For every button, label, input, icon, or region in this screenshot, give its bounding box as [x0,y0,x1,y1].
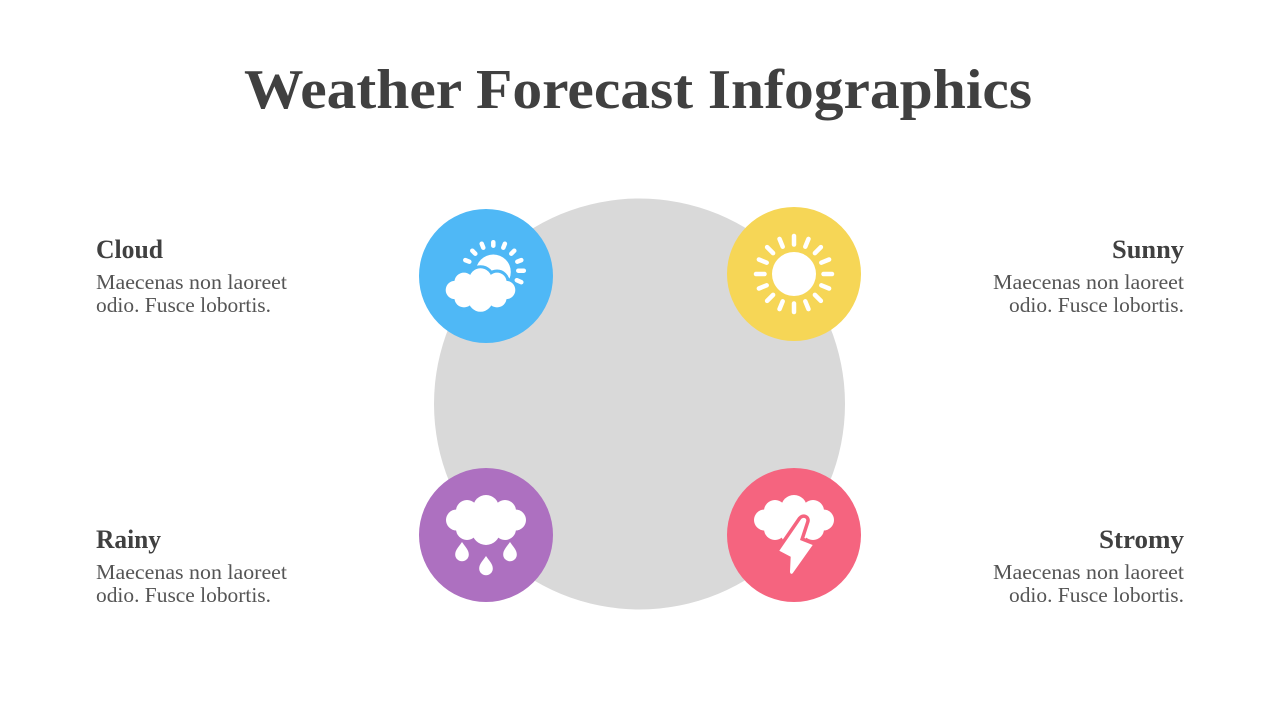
text block: cloud [96,235,287,317]
title: Weather Forecast Infographics [244,59,1032,121]
panel: cloud icon [419,209,553,343]
text block: rainy [96,525,287,607]
text block: rainy: odio. Fusce lobortis. [96,583,271,607]
text block: stromy: Maecenas non laoreet [993,560,1184,584]
text block: sunny: odio. Fusce lobortis. [1009,293,1184,317]
text block: sunny [993,235,1184,317]
text block: stromy: odio. Fusce lobortis. [1009,583,1184,607]
icon: sun disc [476,254,511,290]
text block: stromy [993,525,1184,607]
icon: lightning bolt [779,518,813,574]
central grey circle [434,198,845,610]
text block: rainy: Rainy [96,525,161,554]
text block: rainy: Maecenas non laoreet [96,560,287,584]
icon: cloud [446,495,526,545]
text block: stromy: Stromy [1099,525,1184,554]
text block: sunny: Maecenas non laoreet [993,270,1184,294]
icon: sun disc [772,252,816,296]
icon: cloud [446,268,515,312]
icon: sun rays [756,236,832,312]
icon: sun rays behind cloud [465,242,524,282]
panel: sunny icon [727,207,861,341]
text block: sunny: Sunny [1112,235,1184,264]
text block: cloud: Cloud [96,235,164,264]
text block: cloud: odio. Fusce lobortis. [96,293,271,317]
panel: rainy icon [419,468,553,602]
icon: cloud [754,495,834,545]
icon: rain drops [455,542,517,575]
panel: stormy icon [727,468,861,602]
text block: cloud: Maecenas non laoreet [96,270,287,294]
